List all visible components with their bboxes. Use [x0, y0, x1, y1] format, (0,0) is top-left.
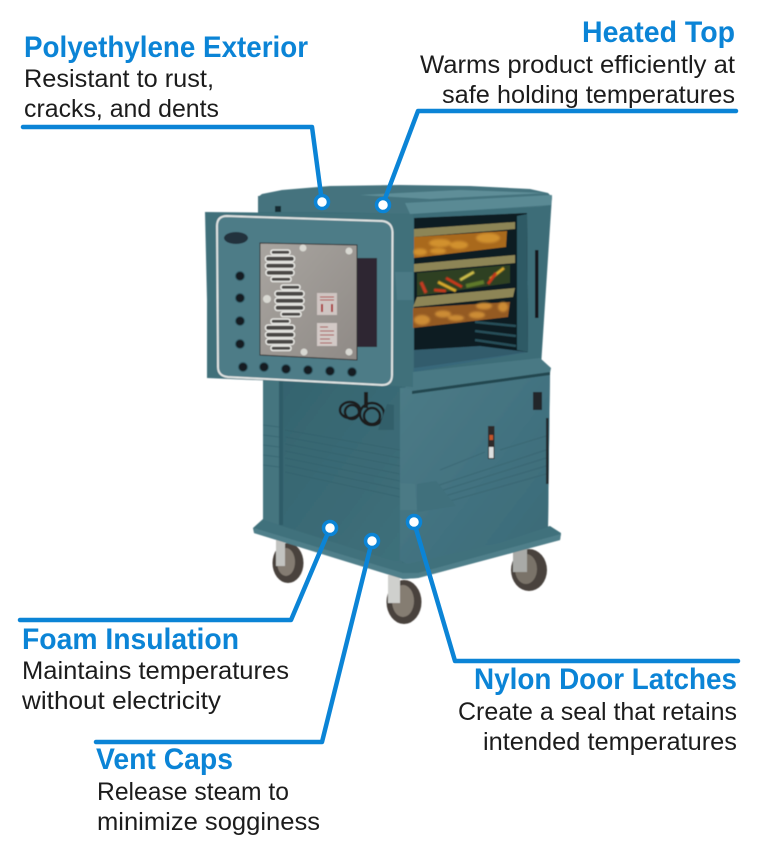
tray 2 vegetables: [417, 265, 510, 296]
control panel: [488, 426, 494, 459]
description: safe holding temperatures: [442, 81, 735, 109]
marker: [324, 522, 336, 534]
product: insulated food cart: [205, 185, 561, 624]
marker: [408, 516, 420, 528]
lid ridge: [360, 190, 545, 199]
silhouette backing: [258, 196, 552, 565]
lower rails: [475, 322, 516, 346]
tray 2 vegetable colours: [421, 268, 504, 293]
right handle: [535, 250, 538, 318]
warning labels: [317, 293, 337, 346]
lower body side post: [263, 380, 279, 525]
power cord: [340, 392, 384, 425]
leader line: [23, 127, 322, 202]
lid notch: [275, 206, 281, 212]
door panel with white trim: [217, 216, 392, 385]
plate screws: [263, 244, 352, 356]
tray 1 food: [414, 231, 507, 258]
base tray: [253, 519, 561, 579]
interior wall: [517, 214, 528, 352]
lid front highlight: [405, 195, 552, 214]
description: Maintains temperatures: [22, 657, 289, 685]
leader line: [414, 522, 738, 661]
cord mount: [378, 404, 394, 430]
bottom front lip: [405, 358, 551, 392]
callout: heated top: [376, 16, 736, 212]
description: intended temperatures: [483, 728, 737, 756]
vent group 2: [275, 285, 304, 316]
tray 3 food highlights: [414, 302, 508, 325]
heading: Foam Insulation: [22, 623, 239, 656]
side ribs: [263, 425, 400, 497]
description: cracks, and dents: [24, 95, 219, 123]
post groove: [279, 381, 283, 525]
logo badge: [224, 232, 248, 244]
leader line: [383, 111, 736, 204]
lid: [258, 185, 552, 214]
nylon latch: [400, 483, 417, 510]
description: Release steam to: [97, 778, 289, 806]
callout: vent caps: [96, 534, 378, 836]
open door: [205, 212, 413, 387]
heading: Vent Caps: [96, 743, 233, 776]
tray 2 band: [414, 255, 515, 272]
vent square: [533, 392, 542, 410]
latch recess: [417, 481, 456, 512]
lip shadow: [412, 372, 550, 394]
heading: Polyethylene Exterior: [24, 31, 308, 64]
tray 1 food highlights: [413, 233, 500, 256]
vent group 3: [266, 319, 294, 350]
callout: polyethylene exterior: [23, 31, 328, 208]
cabinet interior: [414, 213, 528, 368]
steel plate: [260, 243, 357, 360]
interior floor: [414, 346, 528, 372]
tray 3 food: [413, 302, 510, 328]
lower front door: [400, 368, 550, 564]
right edge: [546, 418, 548, 484]
upper cabinet frame: [405, 204, 541, 386]
dark window: [357, 258, 377, 347]
leader line: [96, 541, 372, 742]
marker: [376, 198, 390, 212]
heading: Heated Top: [582, 16, 735, 49]
lower body side: [263, 378, 402, 564]
description: Resistant to rust,: [24, 65, 214, 93]
vent group 1: [266, 250, 294, 282]
marker: [366, 534, 378, 548]
description: minimize sogginess: [97, 808, 320, 836]
door holes: [236, 272, 356, 376]
door hinge block: [395, 272, 413, 300]
callout: foam insulation: [20, 522, 336, 715]
heading: Nylon Door Latches: [474, 663, 737, 696]
wheels: [272, 540, 547, 624]
front ribs: [418, 436, 546, 510]
tray 1 band: [414, 222, 515, 237]
marker: [316, 196, 328, 208]
description: Create a seal that retains: [458, 698, 737, 726]
tray 3 band: [413, 288, 515, 307]
description: Warms product efficiently at: [420, 51, 735, 79]
leader line: [20, 528, 330, 620]
base highlight: [254, 528, 561, 579]
callout: nylon door latches: [408, 516, 738, 756]
tray rack of food: [413, 222, 515, 328]
description: without electricity: [21, 687, 222, 715]
